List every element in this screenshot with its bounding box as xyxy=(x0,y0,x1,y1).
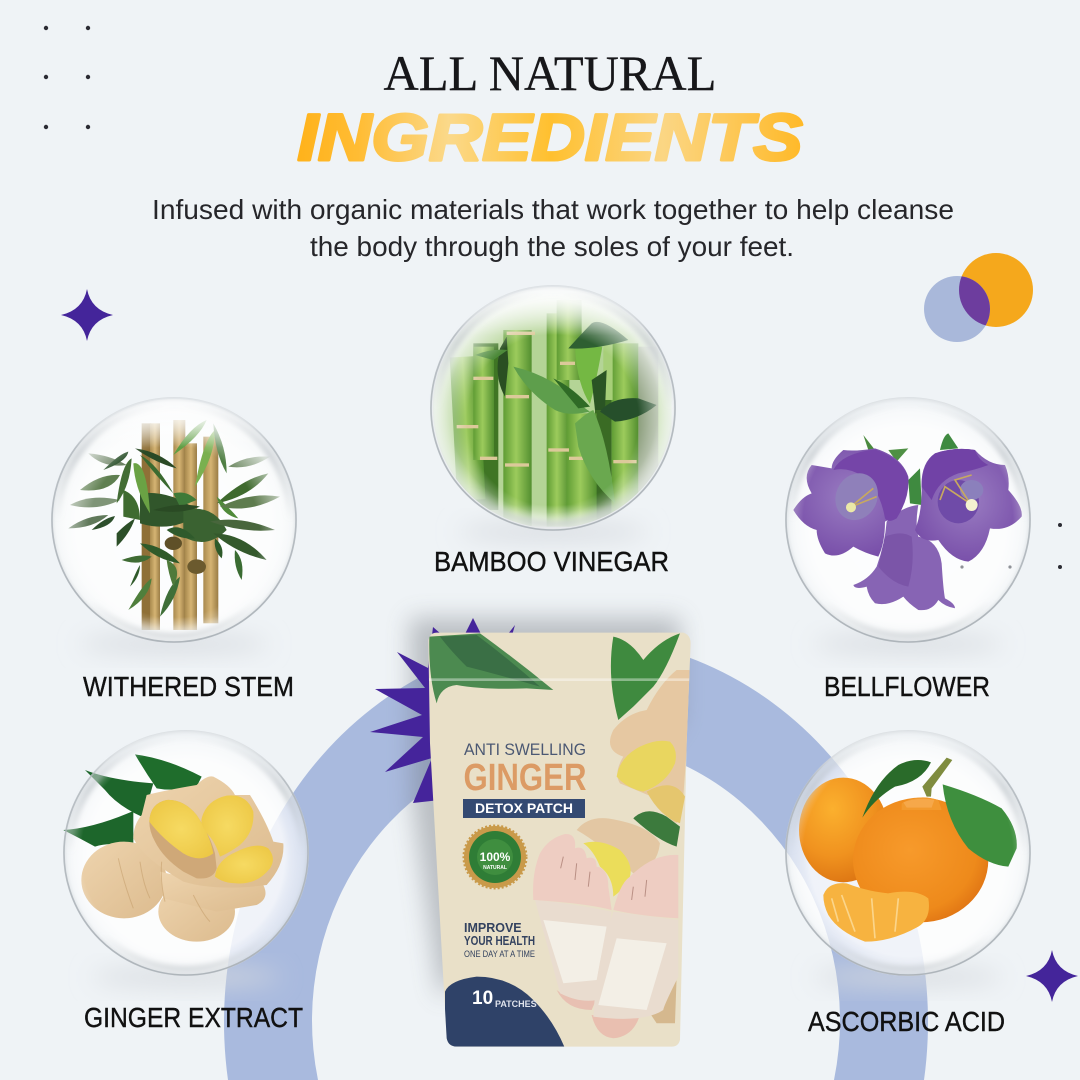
panel: bellflower sphere xyxy=(785,397,1031,652)
toe gaps xyxy=(561,857,647,900)
label: ascorbic acid: ASCORBIC ACID xyxy=(808,1006,1005,1037)
bamboo leaves xyxy=(575,347,602,404)
pouch count: 10 xyxy=(472,988,493,1009)
stem leaves xyxy=(140,493,200,527)
feet xyxy=(533,834,612,910)
decorative dots top-left xyxy=(44,26,90,129)
mandarin segment xyxy=(823,883,929,942)
label: bellflower: BELLFLOWER xyxy=(824,671,990,702)
pouch tagline xyxy=(464,921,535,960)
ginger leaves xyxy=(135,754,202,790)
title: ALL NATURAL xyxy=(384,45,716,101)
pouch shadow xyxy=(410,618,680,1000)
icon: overlapping circles xyxy=(924,253,1033,342)
pouch tagline: ONE DAY AT A TIME xyxy=(464,949,535,960)
flowers xyxy=(793,433,1022,610)
title highlight: INGREDIENTS xyxy=(298,100,802,174)
icon: purple sparkle right xyxy=(1026,950,1078,1002)
pouch leaves xyxy=(429,633,553,703)
decorative dots right xyxy=(1058,523,1062,569)
label: bamboo vinegar: BAMBOO VINEGAR xyxy=(434,546,669,577)
pouch tagline: IMPROVE xyxy=(464,921,522,935)
oranges xyxy=(799,778,888,882)
ginger root xyxy=(81,776,283,942)
pouch ginger xyxy=(610,670,690,823)
pouch navy corner xyxy=(445,977,565,1048)
icon: purple sparkle left xyxy=(61,289,113,341)
pouch seal: 100% xyxy=(480,850,511,864)
purple burst behind pouch xyxy=(370,618,515,803)
label: withered stem: WITHERED STEM xyxy=(83,671,294,702)
panel: ginger extract sphere xyxy=(63,730,309,985)
panel: withered stem sphere xyxy=(51,397,297,652)
subtitle xyxy=(152,194,954,262)
ginger slices xyxy=(149,800,217,879)
zip line xyxy=(428,678,692,681)
pouch seal xyxy=(464,826,526,888)
pouch count xyxy=(472,988,537,1009)
subtitle: the body through the soles of your feet. xyxy=(310,231,794,262)
title xyxy=(298,45,802,174)
label: ginger extract: GINGER EXTRACT xyxy=(84,1002,303,1033)
panel: ascorbic acid sphere xyxy=(785,730,1031,985)
product pouch xyxy=(428,633,692,1048)
pouch seal: NATURAL xyxy=(483,865,507,871)
pouch count: PATCHES xyxy=(495,999,537,1009)
pouch text: GINGER xyxy=(464,757,586,799)
pouch text: ANTI SWELLING xyxy=(464,740,586,759)
pouch text xyxy=(463,740,586,818)
pouch text: DETOX PATCH xyxy=(475,800,573,816)
panel: bamboo vinegar sphere xyxy=(430,285,676,540)
stem and leaves xyxy=(922,758,952,797)
subtitle: Infused with organic materials that work together to help cleanse xyxy=(152,194,954,225)
pouch tagline: YOUR HEALTH xyxy=(464,934,535,948)
blue ring behind product xyxy=(224,637,928,1080)
